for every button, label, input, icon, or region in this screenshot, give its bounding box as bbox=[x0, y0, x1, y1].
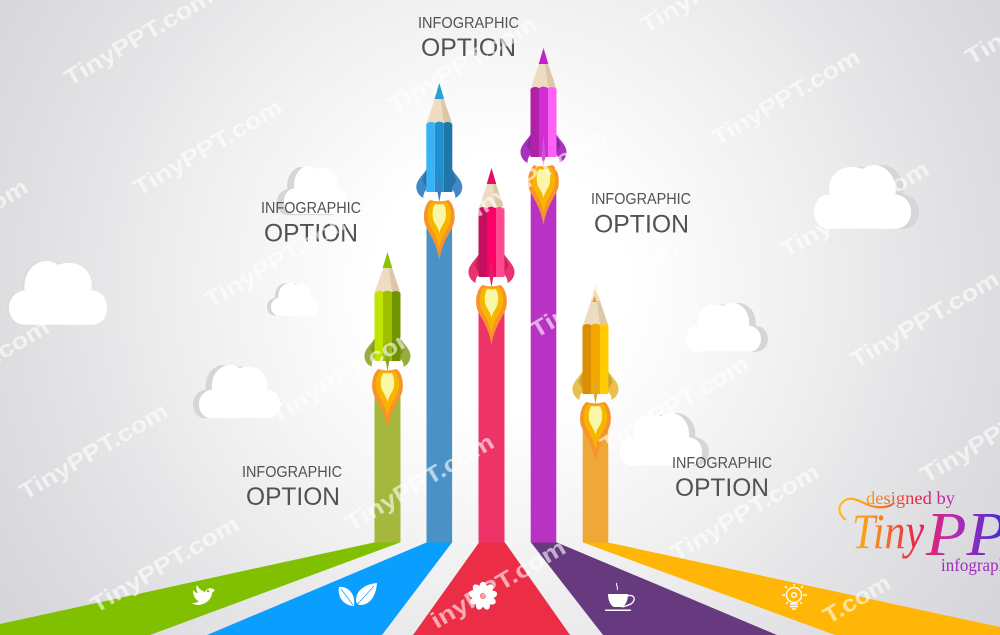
icon: bird bbox=[192, 585, 215, 605]
rocket: purple bbox=[520, 48, 566, 542]
logo wordmark: Tiny bbox=[852, 503, 925, 559]
watermark: TinyPPT.com bbox=[666, 458, 823, 566]
watermark: TinyPPT.com bbox=[200, 205, 357, 313]
label: top option: INFOGRAPHIC bbox=[418, 15, 519, 32]
ray: yellow bbox=[583, 542, 1000, 635]
label: lower left option: OPTION bbox=[246, 483, 340, 511]
flame bbox=[372, 369, 403, 429]
icon: light bulb bbox=[782, 584, 807, 609]
watermark: TinyPPT.com bbox=[707, 43, 864, 151]
label: left option bbox=[261, 200, 361, 248]
pencil body bbox=[582, 285, 608, 404]
fins bbox=[364, 337, 410, 367]
watermark: TinyPPT.com bbox=[86, 510, 243, 618]
fins bbox=[572, 370, 618, 400]
label: left option: INFOGRAPHIC bbox=[261, 200, 361, 217]
label: top option: OPTION bbox=[421, 34, 516, 62]
label: left option: OPTION bbox=[264, 220, 358, 248]
pencil body bbox=[426, 83, 452, 202]
rays on the ground bbox=[0, 542, 1000, 635]
label: right option bbox=[591, 191, 691, 238]
ray: red bbox=[413, 542, 570, 635]
logo caption: designed by bbox=[866, 488, 955, 508]
flame bbox=[528, 165, 559, 225]
rocket: green bbox=[364, 252, 410, 542]
watermark: T.com bbox=[818, 569, 895, 629]
label: lower left option bbox=[242, 464, 342, 511]
rocket: pink bbox=[468, 168, 514, 542]
watermark: TinyPPT.com bbox=[454, 122, 611, 230]
label: lower left option: INFOGRAPHIC bbox=[242, 464, 342, 481]
label: top option bbox=[418, 15, 519, 62]
cloud: lower right bbox=[620, 413, 709, 466]
flame bbox=[580, 402, 611, 462]
cloud: large right bbox=[814, 165, 919, 229]
label: right option: OPTION bbox=[594, 210, 689, 238]
watermark: TinyPPT.com bbox=[266, 320, 423, 428]
label: lower right option: INFOGRAPHIC bbox=[672, 455, 772, 472]
watermark: TinyPPT.com bbox=[129, 93, 286, 201]
ray: green bbox=[0, 542, 400, 635]
watermark: TinyPPT.com bbox=[776, 155, 933, 263]
fins bbox=[416, 168, 462, 198]
rocket: orange bbox=[572, 285, 618, 542]
ray: purple bbox=[531, 542, 777, 635]
watermark: TinyPPT.com bbox=[15, 397, 172, 505]
fins bbox=[520, 133, 566, 163]
pink trail bbox=[478, 308, 504, 542]
label: lower right option: OPTION bbox=[675, 474, 769, 502]
label: lower right option bbox=[672, 455, 772, 502]
logo swash bbox=[839, 499, 893, 520]
watermark: TinyPPT.com bbox=[846, 265, 1000, 373]
cloud: upper centre-left bbox=[277, 166, 348, 215]
cloud: small centre-left bbox=[267, 283, 319, 316]
rocket: blue bbox=[416, 83, 462, 542]
icon: coffee cup bbox=[605, 583, 634, 611]
blue trail bbox=[426, 223, 452, 542]
icon: leaves bbox=[339, 583, 377, 607]
watermark: TinyPPT.com bbox=[384, 10, 541, 118]
flame bbox=[424, 200, 455, 260]
label: right option: INFOGRAPHIC bbox=[591, 191, 691, 208]
fins bbox=[468, 253, 514, 283]
pencil body bbox=[374, 252, 400, 371]
watermark: TinyPPT.com bbox=[596, 350, 753, 458]
ray: blue bbox=[207, 542, 452, 635]
watermark: inyPPT.com bbox=[426, 534, 570, 633]
cloud: large left bbox=[6, 261, 107, 325]
flame bbox=[476, 285, 507, 345]
clouds bbox=[6, 165, 919, 466]
logo: designed by TinyPPT bbox=[839, 488, 1000, 575]
cloud: mid right bbox=[686, 303, 768, 352]
green trail bbox=[374, 392, 400, 542]
watermark: TinyPPT.com bbox=[341, 428, 498, 536]
orange trail bbox=[583, 425, 608, 542]
pencil body bbox=[530, 48, 556, 167]
cloud: lower left bbox=[193, 365, 280, 418]
purple trail bbox=[531, 188, 556, 542]
watermark: TinyPPT.com bbox=[526, 235, 683, 343]
icon: flower bbox=[468, 582, 498, 611]
pencil body bbox=[478, 168, 504, 287]
